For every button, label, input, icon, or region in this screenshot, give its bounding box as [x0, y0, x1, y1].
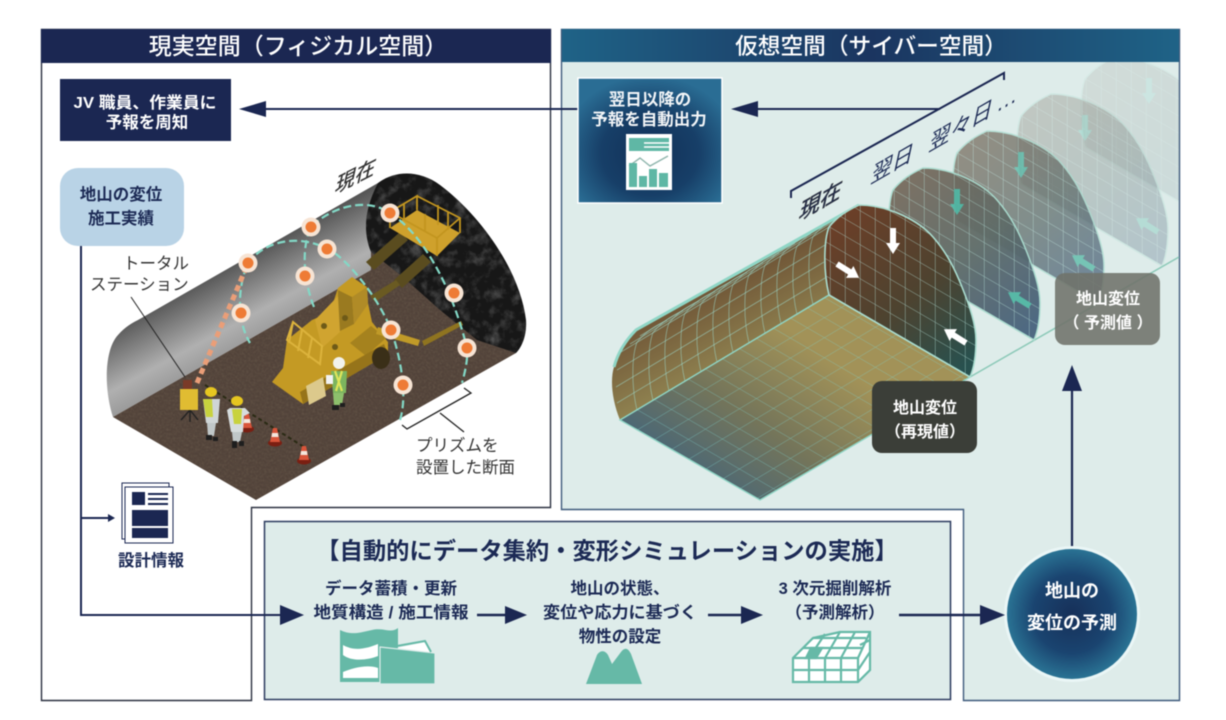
notice box: JV 職員、作業員に [74, 94, 216, 112]
panel: physical space [41, 29, 551, 700]
model wall [612, 205, 859, 420]
label: design information: 設計情報 [118, 551, 184, 570]
workers [203, 357, 347, 448]
notice box: 予報を周知 [106, 113, 188, 132]
total station [180, 380, 198, 422]
virtual tunnel model [612, 205, 976, 500]
forecast output box: 予報を自動出力 [591, 109, 707, 129]
ground displacement and work record box: 施工実績 [88, 209, 154, 228]
heading: physical space [41, 29, 551, 63]
circle: ground displacement prediction: 地山の [1045, 581, 1099, 601]
label: total station: トータル [123, 254, 189, 273]
circle: ground displacement prediction [1004, 546, 1140, 682]
step: data accumulation: データ蓄積・更新 [325, 578, 457, 598]
icon: design documents [122, 483, 173, 543]
step: property settings: 物性の設定 [579, 627, 661, 646]
arrow: output to notice [239, 101, 581, 117]
arrow: step 1 to step 2 [477, 606, 527, 624]
ground displacement and work record box [60, 168, 184, 246]
yellow excavator [272, 196, 463, 405]
circle: ground displacement prediction: 変位の予測 [1027, 613, 1117, 633]
model floor [620, 295, 970, 500]
label: displacement reproduced [872, 381, 977, 453]
prisms [232, 204, 476, 394]
step: property settings: 地山の状態、 [570, 579, 670, 598]
heading: cyber space: 仮想空間（サイバー空間） [735, 33, 1007, 59]
total station beam [197, 263, 248, 383]
label: prism section: 設置した断面 [416, 458, 515, 477]
dashed measurement arcs [240, 205, 467, 420]
arrow: step 2 to step 3 [708, 606, 763, 624]
panel: automated simulation [264, 522, 950, 700]
heading: physical space: 現実空間（フィジカル空間） [149, 33, 447, 59]
step: data accumulation [314, 578, 469, 684]
arrow: step 3 to prediction [899, 605, 1005, 625]
step: 3D excavation analysis [779, 578, 892, 682]
base line [970, 257, 1179, 377]
timeline labels: 現在 [798, 176, 843, 226]
label: prism section [402, 388, 515, 477]
forecast cross sections [888, 62, 1179, 341]
label: total station: ステーション [90, 276, 189, 294]
label: displacement reproduced: （再現値） [885, 422, 965, 441]
cones and barrier [205, 385, 311, 464]
arrow: record to simulation [81, 246, 304, 625]
icon: geology and document [340, 628, 435, 684]
timeline labels: 翌日 [870, 140, 913, 189]
heading: cyber space [562, 29, 1179, 62]
model front face [825, 205, 976, 377]
panel: cyber space [562, 29, 1180, 700]
tunnel face [366, 173, 526, 353]
step: 3D excavation analysis: （予測解析） [786, 602, 884, 622]
tunnel floor [113, 252, 516, 500]
ground displacement and work record box: 地山の変位 [80, 185, 163, 204]
icon: 3D mesh [793, 632, 870, 682]
forecast output box: 翌日以降の [609, 90, 691, 109]
forecast output box [578, 78, 722, 203]
timeline labels: 翌々日 … [928, 81, 1018, 157]
label: total station [90, 254, 189, 377]
notice box [60, 79, 231, 141]
tunnel wall [107, 183, 378, 417]
timeline labels [798, 81, 1018, 226]
arrow: prediction up to forecast [1062, 365, 1082, 550]
displacement arrows [833, 228, 970, 349]
label: displacement forecast [1055, 273, 1160, 345]
illustration: physical tunnel [90, 154, 526, 500]
step: property settings: 変位や応力に基づく [543, 603, 697, 622]
label: displacement reproduced: 地山変位 [893, 398, 957, 417]
label: displacement forecast: （ 予測値 ） [1064, 313, 1152, 332]
step: property settings [543, 579, 697, 684]
step: 3D excavation analysis: 3 次元掘削解析 [779, 578, 892, 598]
step: data accumulation: 地質構造 / 施工情報 [314, 603, 469, 622]
label: displacement forecast: 地山変位 [1076, 289, 1140, 308]
label: current: 現在 [334, 154, 377, 199]
timeline bracket [791, 73, 1004, 198]
icon: report [626, 134, 672, 190]
icon: mountain [586, 649, 642, 684]
label: prism section: プリズムを [416, 436, 498, 455]
arrow: model to output [731, 101, 940, 117]
heading: simulation: 【自動的にデータ集約・変形シミュレーションの実施】 [316, 537, 898, 564]
